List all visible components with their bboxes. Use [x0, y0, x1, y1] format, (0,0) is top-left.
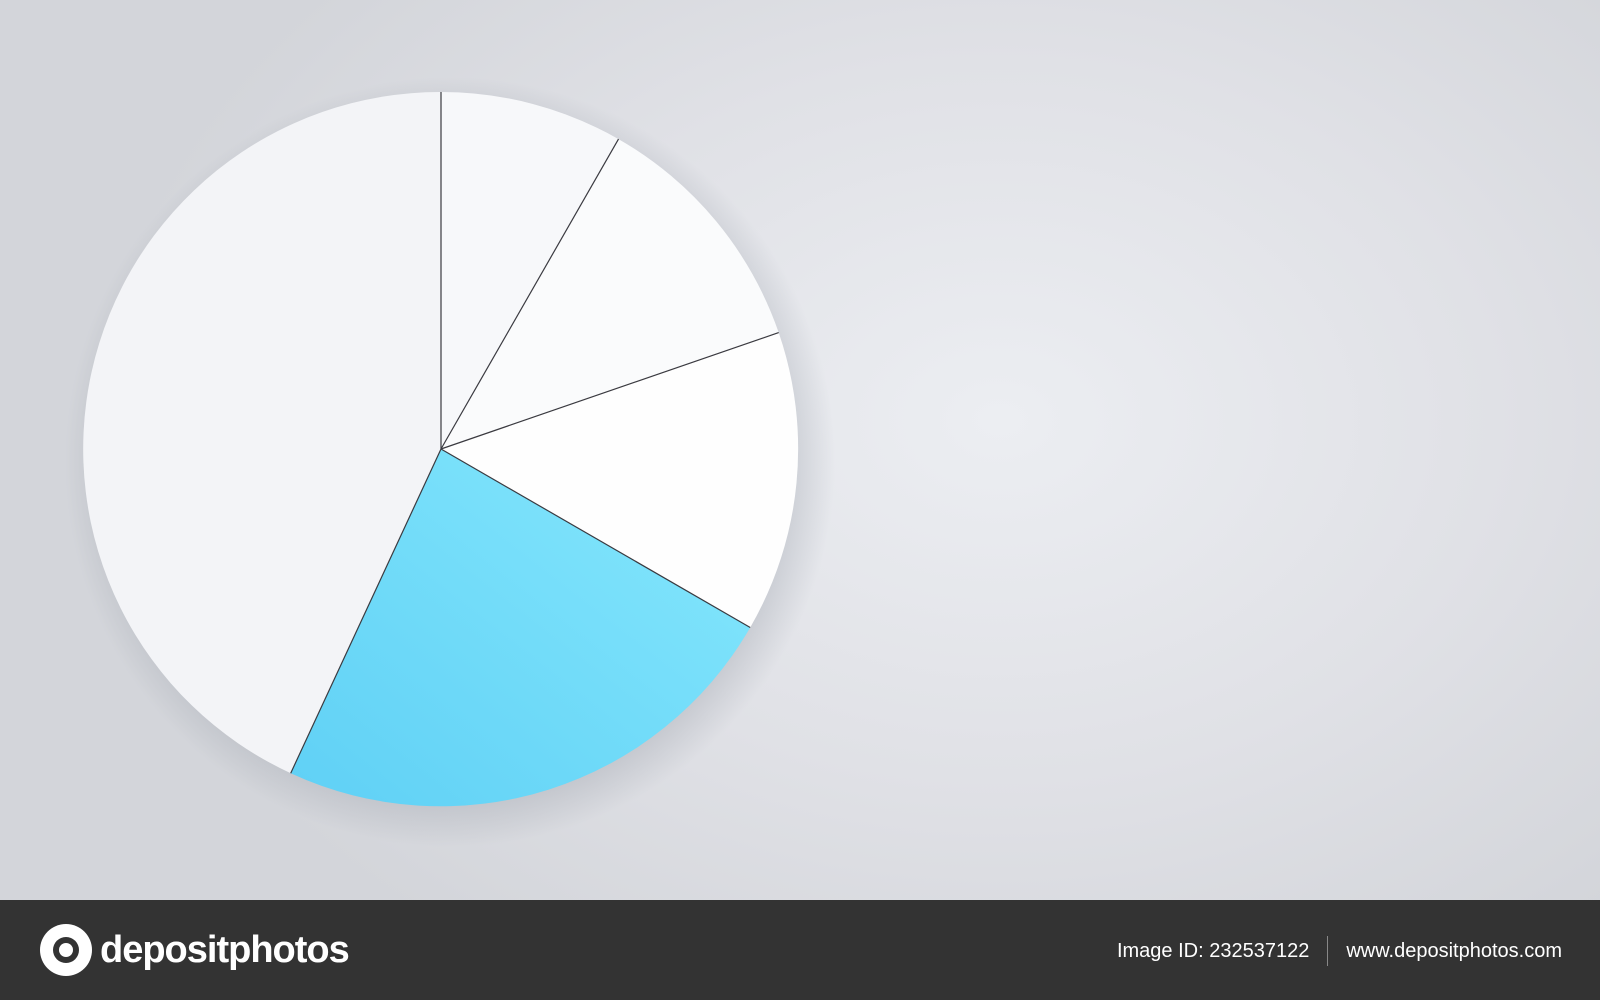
slice: small top — [441, 92, 618, 449]
slice: large white — [83, 92, 441, 773]
footer bar — [0, 900, 1600, 1000]
slice: upper right — [441, 139, 779, 449]
image id text: www.depositphotos.com — [1346, 940, 1562, 962]
image id text: Image ID: 232537122 — [1117, 940, 1309, 962]
logo — [40, 924, 349, 976]
image id text — [1117, 936, 1562, 966]
icon: camera — [40, 924, 92, 976]
logo: depositphotos — [100, 928, 349, 970]
slice: blue — [291, 449, 750, 806]
slice: right — [441, 333, 798, 628]
